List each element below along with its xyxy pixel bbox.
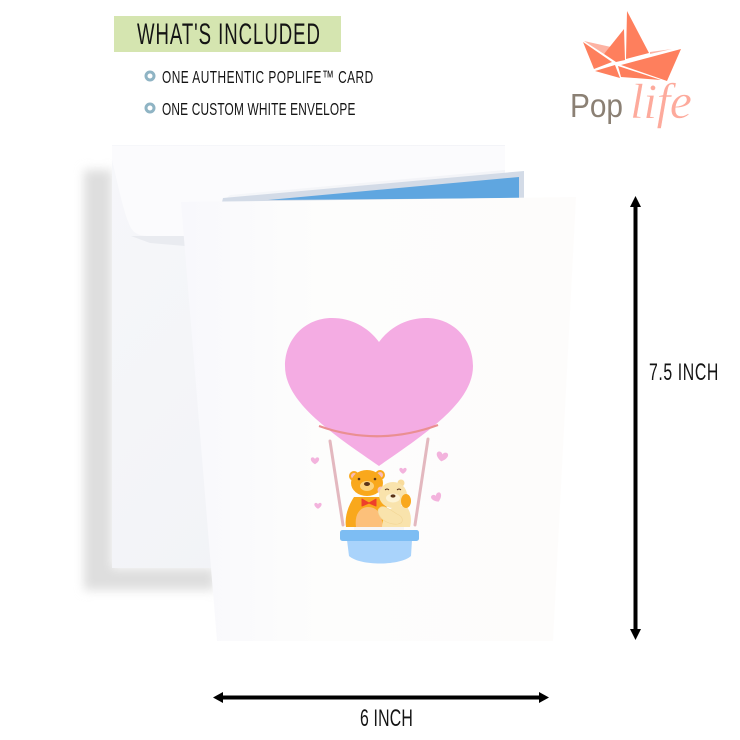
label: height: 7.5 INCH (649, 360, 718, 386)
card inside: blue page (222, 171, 524, 202)
balloon band (319, 425, 438, 436)
heading: what's included: WHAT'S INCLUDED (137, 18, 320, 51)
list: included items: ONE AUTHENTIC POPLIFE™ CARD (162, 68, 373, 88)
greeting card front (181, 197, 576, 641)
balloon ropes (330, 439, 428, 525)
heart balloon (285, 318, 473, 466)
cream bear (378, 480, 411, 527)
envelope (112, 145, 505, 568)
basket (340, 527, 419, 564)
arrow: width (213, 692, 549, 703)
logo: poplife (570, 11, 692, 129)
list: included items: ONE CUSTOM WHITE ENVELOPE (162, 100, 355, 120)
small hearts (311, 451, 449, 509)
label: width: 6 INCH (360, 706, 413, 732)
hot air balloon illustration (285, 318, 473, 564)
arrow: height (630, 196, 641, 640)
envelope shadow (84, 170, 215, 590)
orange bear (346, 470, 392, 527)
logo: poplife: life (630, 73, 692, 129)
logo: poplife: Pop (570, 87, 623, 124)
list: included items (146, 68, 373, 120)
